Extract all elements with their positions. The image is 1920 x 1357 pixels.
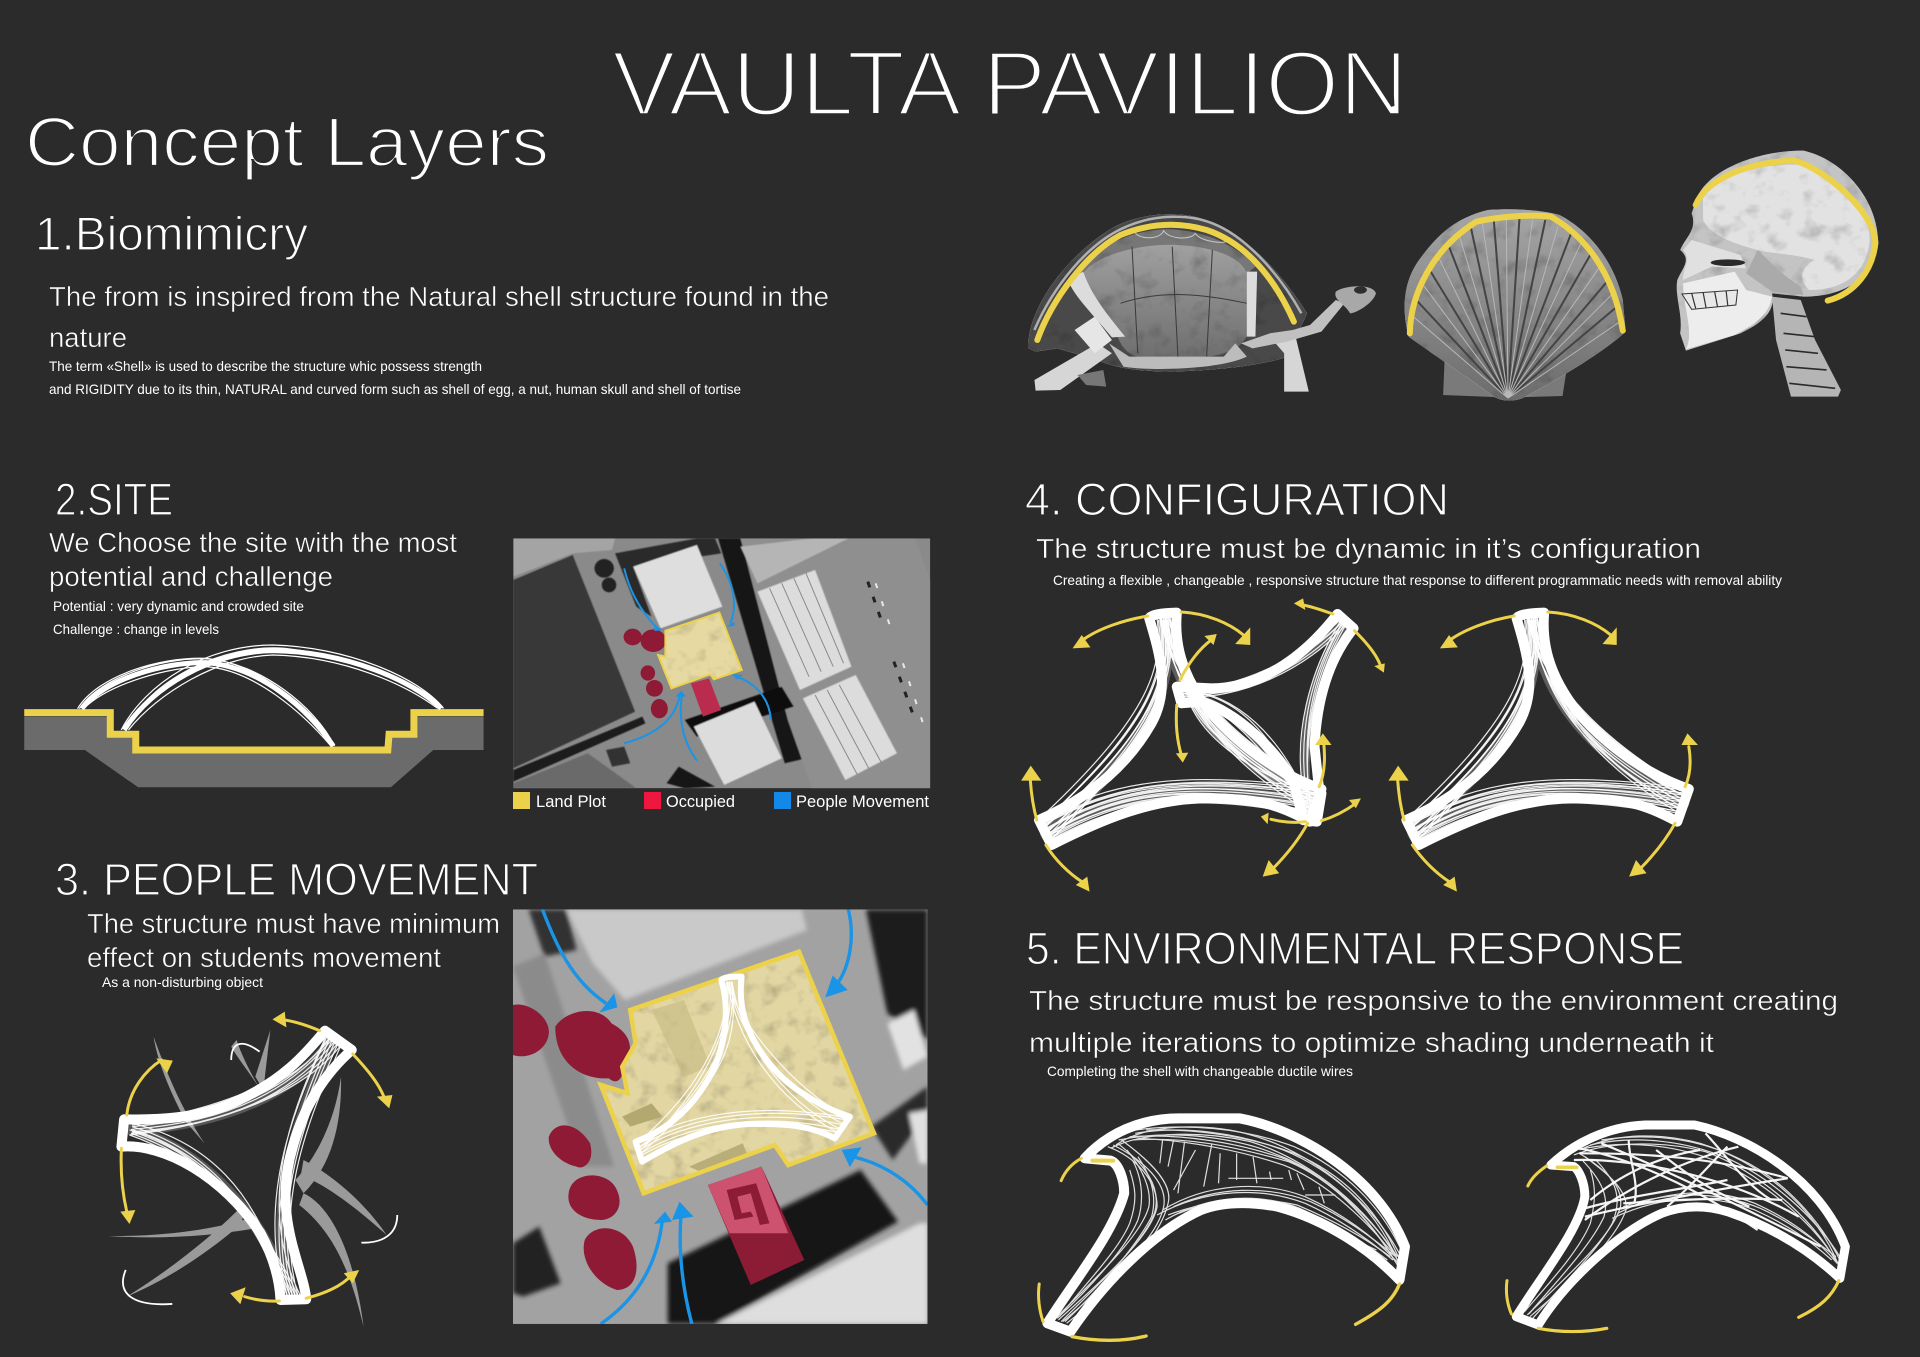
- yellow arc: [1696, 161, 1875, 301]
- text: biomimicry statement: The from is inspired from the Natural shell structure found in the: [49, 281, 829, 312]
- heading: site: 2.SITE: [55, 474, 173, 525]
- arrows: [1450, 616, 1514, 640]
- trees: [624, 629, 668, 718]
- shell plan with shadows and arrows: [108, 1012, 397, 1327]
- shell bundles: [129, 1035, 341, 1297]
- text: movement statement line 1: The structure must have minimum: [87, 908, 500, 939]
- section 1 text: biomimicry: [35, 207, 829, 397]
- configuration: single shell: [1388, 612, 1698, 892]
- text: site statement line 1: We Choose the site with the most: [49, 527, 457, 558]
- heading: configuration: 4. CONFIGURATION: [1025, 474, 1449, 525]
- land plot: [658, 613, 742, 688]
- text: environment detail: Completing the shell with changeable ductile wires: [1047, 1063, 1353, 1079]
- yellow arrows: [285, 1020, 320, 1031]
- environmental response diagrams: [1039, 1118, 1845, 1340]
- configuration diagrams: [1021, 598, 1698, 892]
- text: configuration detail: Creating a flexible , changeable , responsive structure that response to different programmatic needs with removal ability: [1053, 572, 1782, 588]
- heading: environmental response: 5. ENVIRONMENTAL RESPONSE: [1026, 923, 1684, 974]
- yellow wires: [1061, 1158, 1081, 1181]
- section 4 text: configuration: [1025, 474, 1782, 588]
- section 2 text: site: [49, 474, 457, 637]
- heading: people movement: 3. PEOPLE MOVEMENT: [55, 854, 538, 905]
- section 5 text: environmental response: [1026, 923, 1838, 1079]
- occupied block: [708, 1167, 804, 1285]
- arches: [78, 645, 444, 746]
- shell iteration 1: [1039, 1118, 1405, 1340]
- trees: [513, 1005, 637, 1290]
- text: environment statement line 1: The structure must be responsive to the environment creating: [1029, 985, 1838, 1016]
- people movement arrows: [542, 909, 606, 1003]
- image: scallop shell: [1405, 209, 1626, 401]
- configuration: double shell: [1021, 598, 1385, 892]
- section 3 text: people movement: [55, 854, 538, 990]
- shadows: [108, 1030, 387, 1327]
- roof stripes and cars: [770, 573, 882, 775]
- yellow arc: [1037, 225, 1294, 340]
- occupied: [691, 678, 721, 717]
- arrows: [1083, 616, 1148, 640]
- image: tortoise skeleton: [1029, 214, 1376, 392]
- text: environment statement line 2: multiple iterations to optimize shading underneath it: [1029, 1027, 1714, 1058]
- second shell arm: [1177, 614, 1354, 822]
- text: site statement line 2: potential and challenge: [49, 561, 333, 592]
- biomimicry images: [1029, 151, 1878, 401]
- site section drawing: [24, 645, 484, 787]
- image: human skull: [1677, 151, 1878, 397]
- legend: people movement: People Movement: [796, 792, 929, 811]
- shell outline: [121, 1031, 352, 1300]
- text: biomimicry statement second line: nature: [49, 322, 127, 353]
- people movement arrows: [624, 568, 658, 628]
- legend: occupied: Occupied: [666, 792, 735, 811]
- yellow wires: [1528, 1166, 1546, 1186]
- structure plan: [637, 982, 733, 1153]
- map legend: [513, 792, 929, 811]
- aerial zoom of site with structure: [513, 909, 928, 1324]
- text: biomimicry detail line 2: and RIGIDITY due to its thin, NATURAL and curved form such as shell of egg, a nut, human skull and shell of tortise: [49, 381, 741, 397]
- heading: biomimicry: 1.Biomimicry: [35, 207, 309, 260]
- shell iteration 2: [1506, 1125, 1845, 1332]
- aerial site map: [513, 538, 930, 788]
- title: VAULTA PAVILION: [612, 33, 1408, 135]
- site section drawing and aerial map: [24, 538, 930, 788]
- text: potential: Potential : very dynamic and crowded site: [53, 598, 304, 614]
- text: challenge: Challenge : change in levels: [53, 621, 219, 637]
- heading: concept layers: Concept Layers: [25, 103, 549, 181]
- text: movement statement line 2: effect on students movement: [87, 942, 441, 973]
- text: biomimicry detail line 1: The term «Shell» is used to describe the structure whic possess strength: [49, 358, 482, 374]
- people movement diagrams: [108, 909, 928, 1327]
- land plot: [601, 952, 874, 1193]
- yellow arc: [1410, 216, 1623, 333]
- text: non-disturbing: As a non-disturbing object: [102, 974, 263, 990]
- text: configuration statement: The structure must be dynamic in it’s configuration: [1036, 533, 1701, 564]
- legend: land plot: Land Plot: [536, 792, 606, 811]
